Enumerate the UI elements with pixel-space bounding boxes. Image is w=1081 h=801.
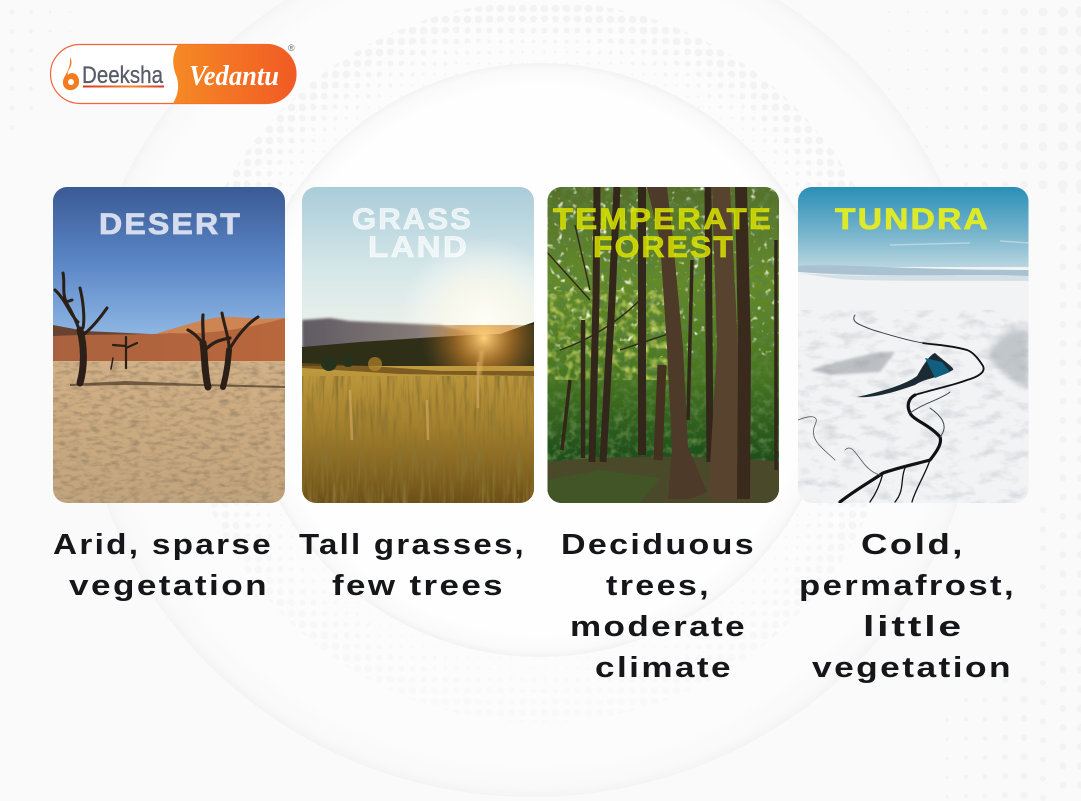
logo pill: [50, 44, 296, 104]
panel: tundra: [798, 187, 1029, 503]
panel: grassland: [302, 187, 534, 503]
logo orange section: [173, 44, 296, 104]
dark ridge: [857, 353, 953, 397]
LAND: LAND: [368, 231, 469, 264]
caption: tundra: Cold,: [861, 529, 965, 561]
grassland label: [352, 203, 473, 264]
panel: temperate forest: [545, 187, 780, 503]
tundra label: TUNDRA: [835, 203, 990, 236]
caption: tundra: little: [863, 611, 964, 643]
GRASS: GRASS: [352, 203, 473, 236]
desert label: DESERT: [99, 208, 242, 241]
desert photo: [53, 187, 285, 503]
braided river: [798, 315, 984, 502]
Deeksha wordmark: Deeksha: [82, 62, 164, 89]
caption: tundra: [799, 529, 1016, 684]
caption: temperate forest: climate: [595, 652, 733, 684]
FOREST: FOREST: [593, 231, 735, 264]
forest photo: [545, 187, 780, 503]
Vedantu wordmark: Vedantu: [189, 60, 279, 92]
caption: temperate forest: [561, 529, 756, 684]
icon: flame: [63, 57, 79, 90]
caption: grassland: few trees: [332, 570, 505, 602]
caption: temperate forest: moderate: [570, 611, 747, 643]
registered mark: ®: [288, 43, 295, 53]
caption: temperate forest: trees,: [606, 570, 711, 602]
caption: desert: vegetation: [69, 570, 269, 602]
wordmark underline: [83, 86, 164, 88]
logo: Deeksha Vedantu: [50, 43, 296, 104]
grassland photo: [302, 187, 534, 503]
caption: temperate forest: Deciduous: [561, 529, 756, 561]
TEMPERATE: TEMPERATE: [553, 203, 773, 236]
caption: desert: [53, 529, 273, 602]
caption: tundra: permafrost,: [799, 570, 1016, 602]
forest label: [553, 203, 773, 264]
panel: desert: [53, 187, 285, 503]
caption: grassland: [299, 529, 526, 602]
caption: tundra: vegetation: [812, 652, 1013, 684]
dead trees: [55, 273, 258, 387]
caption: grassland: Tall grasses,: [299, 529, 526, 561]
tundra photo: [798, 187, 1029, 503]
caption: desert: Arid, sparse: [53, 529, 273, 561]
